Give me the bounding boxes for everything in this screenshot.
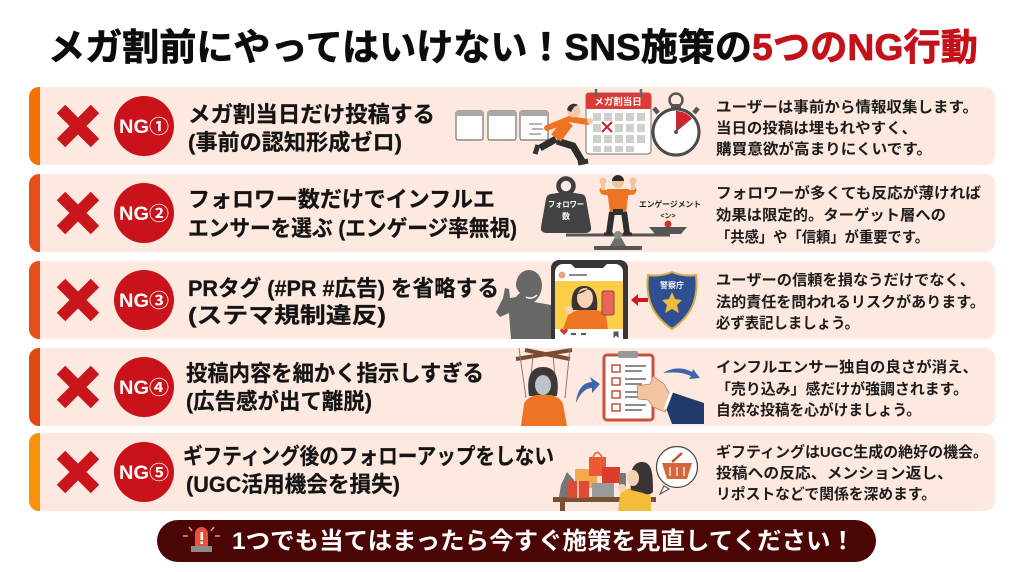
panel: NG4: NG④ xyxy=(119,377,169,399)
illustration: scale with weight and person: <ン> xyxy=(660,213,676,220)
panel: NG3: 必ず表記しましょう。 xyxy=(716,314,859,332)
panel: NG4: インフルエンサー独自の良さが消え、 xyxy=(716,358,978,376)
panel: NG5: ギフティング後のフォローアップをしない xyxy=(183,444,554,469)
illustration: phone, shadow figure and police badge: 警察庁 xyxy=(660,280,684,290)
panel: NG2: フォロワーが多くても反応が薄ければ xyxy=(716,184,981,202)
panel: NG5 xyxy=(29,433,995,511)
illustration: gifts on table, woman with phone, basket bubble xyxy=(553,446,698,511)
panel: NG5: (UGC活用機会を損失) xyxy=(186,472,400,497)
panel: NG1: NG① xyxy=(119,116,169,138)
panel: NG3 xyxy=(29,260,995,339)
panel: NG3: PRタグ (#PR #広告) を省略する xyxy=(188,276,499,301)
panel: NG1: メガ割当日だけ投稿する xyxy=(188,102,435,127)
panel: NG5: NG⑤ xyxy=(119,462,169,484)
banner: call to action: 1つでも当てはまったら今すぐ施策を見直してください！ xyxy=(232,528,855,555)
panel: NG2: フォロワー数だけでインフルエ xyxy=(188,187,495,212)
panel: NG2: 効果は限定的。ターゲット層への xyxy=(716,206,946,224)
panel: NG2 xyxy=(29,174,995,252)
illustration: scale with weight and person: 数 xyxy=(562,211,570,221)
illustration: running to calendar and stopwatch xyxy=(456,89,699,163)
panel: NG2: NG② xyxy=(119,203,169,225)
title: 5つのNG行動 xyxy=(752,27,978,68)
panel: NG4: (広告感が出て離脱) xyxy=(186,389,372,414)
panel: NG5: リポストなどで関係を深めます。 xyxy=(716,486,936,503)
panel: NG1: ユーザーは事前から情報収集します。 xyxy=(716,98,978,116)
title: メガ割前にやってはいけない！SNS施策の xyxy=(48,27,752,68)
panel: NG3: NG③ xyxy=(119,290,169,312)
panel: NG4 xyxy=(29,348,995,426)
icon: alarm siren xyxy=(183,527,220,552)
illustration: phone, shadow figure and police badge xyxy=(496,260,697,339)
panel: NG3: 法的責任を問われるリスクがあります。 xyxy=(716,293,985,311)
panel: NG1: (事前の認知形成ゼロ) xyxy=(188,130,402,155)
panel: NG2: 「共感」や「信頼」が重要です。 xyxy=(716,228,929,246)
panel: NG3: (ステマ規制違反) xyxy=(188,303,386,328)
panel: NG4: 投稿内容を細かく指示しすぎる xyxy=(186,361,484,386)
illustration: running to calendar and stopwatch: メガ割当日 xyxy=(594,96,642,108)
panel: NG1 xyxy=(29,87,995,165)
panel: NG4: 自然な投稿を心がけましょう。 xyxy=(716,401,921,419)
panel: NG5: ギフティングはUGC生成の絶好の機会。 xyxy=(716,443,988,461)
illustration: scale with weight and person xyxy=(541,175,701,250)
panel: NG1: 購買意欲が高まりにくいです。 xyxy=(716,140,932,158)
panel: NG1: 当日の投稿は埋もれやすく、 xyxy=(716,119,917,137)
panel: NG3: ユーザーの信頼を損なうだけでなく、 xyxy=(716,271,975,289)
panel: NG5: 投稿への反応、メンション返し、 xyxy=(716,464,953,482)
panel: NG4: 「売り込み」感だけが強調されます。 xyxy=(716,380,968,398)
illustration: scale with weight and person: エンゲージメント xyxy=(639,199,701,209)
panel: NG2: エンサーを選ぶ (エンゲージ率無視) xyxy=(188,216,517,241)
banner: call to action xyxy=(157,520,876,562)
illustration: puppet and instruction clipboard xyxy=(516,348,704,426)
illustration: scale with weight and person: フォロワー xyxy=(548,200,584,209)
